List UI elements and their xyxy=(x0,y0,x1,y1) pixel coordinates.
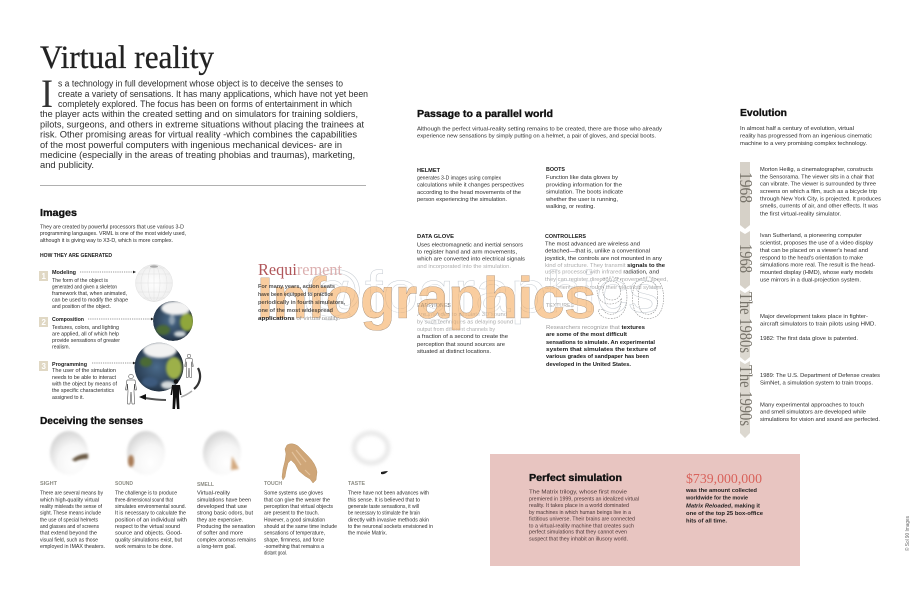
step 3: programming xyxy=(39,361,136,401)
step 1: modeling: 1 xyxy=(42,272,46,281)
taste: be necessary to stimulate the brain xyxy=(348,511,420,517)
smell: simulations have been xyxy=(197,497,251,503)
intro paragraph: create a variety of sensations. It has many applications, which have not yet been xyxy=(58,89,368,99)
step 2: composition: realism. xyxy=(52,344,70,350)
stat: box office amount xyxy=(685,472,763,524)
step 3: programming: with the object by means of xyxy=(51,382,117,388)
evolution intro: machine to a very promising complex technology. xyxy=(740,141,867,147)
panel: requirement xyxy=(258,260,345,322)
perfect simulation text xyxy=(529,490,639,542)
panel: evolution xyxy=(736,107,881,438)
heading: perfect simulation: Perfect simulation xyxy=(529,472,622,484)
stat: box office amount: $739,000,000 xyxy=(686,472,762,487)
sound xyxy=(114,481,187,550)
images description: although it is giving way to X3-D, which is more complex. xyxy=(40,238,173,244)
step 2: composition: provide sensations of greater xyxy=(52,338,120,344)
textures: Researchers recognize that textures xyxy=(546,325,645,331)
controllers: joystick, the controls are not mounted in any xyxy=(544,256,662,262)
watermark: infographics90: @fographics xyxy=(300,260,660,325)
entry: 1980s: 1989: The U.S. Department of Defense creates xyxy=(760,373,880,379)
timeline bar: The 1990s xyxy=(736,365,756,426)
sight: sight. These means include xyxy=(40,511,101,517)
helmet: HELMET xyxy=(417,168,441,174)
textures: various grades of sandpaper has been xyxy=(546,354,650,360)
sound: SOUND xyxy=(115,481,133,487)
sight: that extend beyond the xyxy=(40,531,97,537)
sound: work remains to be done. xyxy=(114,544,173,550)
step 3: programming: The user of the simulation xyxy=(52,368,116,374)
heading: images: Images xyxy=(40,207,77,219)
step 2: composition: are applied, all of which help xyxy=(52,332,119,338)
controllers: CONTROLLERS xyxy=(545,234,587,240)
entry: 1960s sensorama: smells, currents of air, and other effects. It was xyxy=(760,204,878,210)
perfect simulation text: premiered in 1999, presents an idealized virtual xyxy=(529,496,639,502)
requirement text: applications of virtual reality. xyxy=(258,316,340,322)
icon: textured globe xyxy=(153,301,194,341)
smell xyxy=(197,482,256,550)
step 1: modeling: can be used to modify the shape xyxy=(52,298,128,304)
timeline bar: 1968 xyxy=(736,172,756,203)
timeline bar: 1968 xyxy=(736,244,756,273)
sound: three-dimensional sound that xyxy=(115,497,173,503)
step 2: composition: Textures, colors, and lighting xyxy=(52,325,119,331)
subheading: how they are generated: HOW THEY ARE GENERATED xyxy=(40,253,112,259)
passage intro xyxy=(417,126,662,140)
entry: 1980s: SimNet, a simulation system to train troops. xyxy=(760,380,873,386)
data glove: which are converted into electrical signals xyxy=(416,256,525,262)
entry: 1980s: Major development takes place in fighter- xyxy=(760,314,868,320)
taste: directly with invasive methods akin xyxy=(348,517,429,523)
icon: face highlighting mouth xyxy=(354,433,388,474)
smell: of softer and more xyxy=(197,531,243,537)
credit: © Sol 90 Images xyxy=(904,516,911,551)
touch: Some systems use gloves xyxy=(264,491,323,497)
icon: hand xyxy=(282,444,317,483)
requirement text xyxy=(258,284,345,322)
icon: face highlighting nose xyxy=(203,431,241,475)
data glove: to register hand and arm movements, xyxy=(417,250,517,256)
step 3: programming: needs to be able to interact xyxy=(52,375,116,381)
sight: and glasses and of screens xyxy=(40,524,99,530)
sound: It is necessary to calculate the xyxy=(115,511,186,517)
touch: TOUCH xyxy=(264,481,282,487)
requirement text: one of the most widespread xyxy=(258,308,334,314)
watermark: infographics90: 90 xyxy=(594,266,666,331)
boots xyxy=(545,167,623,210)
entry: 1980s: aircraft simulators to train pilots using HMD. xyxy=(760,321,876,327)
step 3: programming: Programming xyxy=(52,362,88,368)
data glove: Uses electromagnetic and inertial sensors xyxy=(417,242,523,248)
intro paragraph: I xyxy=(41,71,53,116)
sight: which high-quality virtual xyxy=(39,497,99,503)
entry: 1960s sensorama: the first virtual-reality simulator. xyxy=(760,211,841,217)
earphones: a fraction of a second to create the xyxy=(417,334,508,340)
earphones: EARPHONES xyxy=(417,303,452,309)
touch: However, a good simulation xyxy=(264,517,325,523)
smell: strong basic odors, but xyxy=(197,511,253,517)
entry: 1990s: simulations for vision and sound are perfected. xyxy=(760,417,880,423)
images description xyxy=(40,224,186,244)
textures: are some of the most difficult xyxy=(546,332,627,338)
stat: box office amount: was the amount collected xyxy=(685,488,758,494)
entry: 1960s sensorama: screens on which a film, such as a bicycle trip xyxy=(760,189,877,195)
step 1: modeling xyxy=(39,270,136,310)
touch: shape, firmness, and force xyxy=(264,537,324,543)
taste: generate taste sensations, it will xyxy=(348,504,419,510)
entry: 1968 hmd: mounted display (HMD), whose early models xyxy=(760,270,873,276)
intro paragraph: medicine (especially in the areas of treating phobias and traumas), marketing, xyxy=(40,150,355,160)
intro paragraph: and publicity. xyxy=(40,160,94,170)
heading: deceiving the senses: Deceiving the senses xyxy=(40,415,143,427)
earphones: perception that sound sources are xyxy=(417,342,505,348)
step 1: modeling: framework that, when animated, xyxy=(52,291,127,297)
timeline bar: The 1980s xyxy=(736,292,756,353)
boots: walking, or resting. xyxy=(545,204,595,210)
smell: SMELL xyxy=(197,482,214,488)
watermark: infographics90: Infographics xyxy=(257,266,595,331)
smell: they are expensive. xyxy=(197,517,243,523)
evolution intro: In almost half a century of evolution, virtual xyxy=(740,126,854,132)
smell: developed that use xyxy=(197,504,247,510)
data glove: and incorporated into the simulation. xyxy=(417,264,511,270)
icon: wireframe sphere xyxy=(136,264,172,302)
evolution intro: reality has progressed from an ingenious cinematic xyxy=(740,134,872,140)
intro paragraph: pilots, surgeons, and others in extreme situations without placing the trainees at xyxy=(40,120,365,130)
step 2: composition: Composition xyxy=(52,317,85,323)
requirement text: have been equipped to practice xyxy=(258,292,333,298)
perfect simulation text: reality. It takes place in a world dominated xyxy=(529,503,629,509)
controllers xyxy=(544,234,668,291)
requirement text: For many years, action seats xyxy=(258,284,335,290)
sound: source and objects. Good- xyxy=(115,531,182,537)
earphones xyxy=(417,303,513,355)
images description: They are created by powerful processors that use various 3-D xyxy=(40,224,184,230)
step 1: modeling: Modeling xyxy=(52,270,77,276)
step 3: programming: 3 xyxy=(42,362,46,371)
entry: 1990s: and smell simulators are developed while xyxy=(760,410,866,416)
sound: position of an individual with xyxy=(115,517,187,523)
intro paragraph: the player acts within the created setting and on simulators for training soldiers, xyxy=(40,109,358,119)
entry: 1960s sensorama xyxy=(760,167,881,217)
boots: simulation. The boots indicate xyxy=(546,190,623,196)
stat: box office amount: worldwide for the movie xyxy=(685,496,748,502)
helmet: person experiencing the simulation. xyxy=(417,197,507,203)
icon: face highlighting ear xyxy=(127,431,165,475)
boots: whether the user is running, xyxy=(545,197,618,203)
smell: Virtual-reality xyxy=(197,491,230,497)
images description: programming languages. VRML is one of the most widely used, xyxy=(40,231,186,237)
sight xyxy=(39,481,105,550)
boots: Function like data gloves by xyxy=(546,175,618,181)
textures: TEXTURES xyxy=(546,303,575,309)
touch: are present to the touch. xyxy=(264,511,319,517)
stat: box office amount: hits of all time. xyxy=(686,518,727,524)
intro paragraph xyxy=(40,71,368,170)
textures xyxy=(546,303,656,368)
data glove: DATA GLOVE xyxy=(417,234,455,240)
taste: There have not been advances with xyxy=(348,491,429,497)
perfect simulation text: perfect simulations that they cannot even xyxy=(529,530,627,536)
step 3: programming: assigned to it. xyxy=(52,395,84,401)
intro paragraph: s a technology in full development whose object is to deceive the senses to xyxy=(58,78,343,88)
touch: perception that virtual objects xyxy=(264,504,333,510)
intro paragraph: of the most powerful computers with ingenious mechanical devices- are in xyxy=(40,140,342,150)
stat: box office amount: Matrix Reloaded , making it xyxy=(686,503,760,509)
taste: this sense. It is believed that to xyxy=(348,497,420,503)
entry: 1968 hmd: scientist, proposes the use of a video display xyxy=(760,240,873,246)
panel: passage to a parallel world xyxy=(416,108,668,368)
sight: SIGHT xyxy=(40,481,57,487)
sight: reality misleads the sense of xyxy=(40,504,102,510)
perfect simulation text: by machines in which human beings live in a xyxy=(529,510,632,516)
step 3: programming: the specific characteristics xyxy=(52,388,114,394)
step 1: modeling: The form of the object is xyxy=(52,278,108,284)
controllers: kind of structure. They transmit signals to the xyxy=(545,263,665,269)
entry: 1990s: Many experimental approaches to touch xyxy=(760,402,864,408)
perfect simulation text: fictitious universe. Their brains are connected xyxy=(529,517,635,523)
taste xyxy=(348,481,433,537)
textures: sensations to simulate. An experimental xyxy=(546,340,655,346)
taste: to the neuronal sockets envisioned in xyxy=(348,524,433,530)
perfect simulation text: to a virtual-reality machine that creates such xyxy=(529,523,634,529)
step 2: composition xyxy=(39,317,154,350)
controllers: and orientation through their electrical system. xyxy=(545,285,663,291)
icon: interactive globe with users xyxy=(126,342,200,409)
entry: 1968 hmd xyxy=(760,233,875,283)
sound: The challenge is to produce xyxy=(115,491,177,497)
watermark: infographics90: Infographics xyxy=(257,266,595,331)
passage intro: Although the perfect virtual-reality setting remains to be created, there are those who already xyxy=(417,126,662,132)
touch: -something that remains a xyxy=(264,544,325,550)
entry: 1968 hmd: respond to the head's orientation to make xyxy=(760,255,863,261)
passage intro: experience new sensations by simply putting on a helmet, a pair of gloves, and special boots. xyxy=(417,134,656,140)
sight: the use of special helmets xyxy=(40,517,98,523)
perfect simulation text: suspect that they inhabit an illusory world. xyxy=(529,536,628,542)
heading: requirement: Requirement xyxy=(258,260,342,279)
smell: complex aromas remains xyxy=(197,537,256,543)
entry: 1990s xyxy=(760,402,880,423)
sight: visual field, such as those xyxy=(40,537,98,543)
touch xyxy=(264,481,337,557)
controllers: detached—that is, unlike a conventional xyxy=(545,248,650,254)
entry: 1960s sensorama: can vibrate. The viewer is surrounded by three xyxy=(760,182,876,188)
earphones: Are intended to simulate 3D sound xyxy=(417,312,507,318)
panel: deceiving the senses xyxy=(39,415,433,557)
step 1: modeling: generated and given a skeleton xyxy=(52,284,117,290)
textures: developed in the United States. xyxy=(546,362,631,368)
data glove xyxy=(416,234,525,270)
smell: Producing the sensation xyxy=(197,524,255,530)
heading: passage to a parallel world: Passage to a parallel world xyxy=(417,108,553,120)
entry: 1968 hmd: Ivan Sutherland, a pioneering computer xyxy=(760,233,862,239)
entry: 1968 hmd: that can be placed on a viewer's head and xyxy=(760,248,868,254)
controllers: user's processor with infrared radiation, and xyxy=(545,270,659,276)
taste: TASTE xyxy=(348,481,366,487)
heading: evolution: Evolution xyxy=(740,107,787,119)
earphones: by such techniques as delaying sound xyxy=(417,320,513,326)
touch: should at the same time include xyxy=(264,524,337,530)
sound: simulates environmental sound. xyxy=(115,504,186,510)
helmet xyxy=(417,168,524,203)
taste: the movie Matrix. xyxy=(348,531,387,537)
entry: 1968 hmd: simulations more real. The result is the head- xyxy=(760,263,875,269)
earphones: situated at distinct locations. xyxy=(417,349,491,355)
touch: that can give the wearer the xyxy=(264,497,330,503)
entry: 1960s sensorama: the Sensorama. The viewer sits in a chair that xyxy=(760,174,874,180)
icon: face highlighting eyes xyxy=(50,431,88,475)
boots: providing information for the xyxy=(546,182,622,188)
entry: 1960s sensorama: Morton Heilig, a cinematographer, constructs xyxy=(760,167,873,173)
helmet: generates 3-D images using complex xyxy=(417,176,501,182)
controllers: they can register direction of movement, speed, xyxy=(545,277,668,283)
helmet: according to the head movements of the xyxy=(417,190,521,196)
controllers: The most advanced are wireless and xyxy=(545,242,640,248)
perfect simulation text: The Matrix trilogy, whose first movie xyxy=(529,490,627,496)
sight: There are several means by xyxy=(40,491,103,497)
sound: respect to the virtual sound xyxy=(115,524,180,530)
panel: perfect simulation xyxy=(490,454,800,566)
boots: BOOTS xyxy=(546,167,566,173)
earphones: output from different channels by xyxy=(417,327,495,333)
step 1: modeling: and position of the object. xyxy=(52,304,111,310)
touch: distant goal. xyxy=(264,551,287,557)
evolution intro xyxy=(740,126,872,147)
stat: box office amount: one of the top 25 box-office xyxy=(686,511,763,517)
entry: 1980s xyxy=(760,314,880,386)
timeline bar xyxy=(736,162,756,438)
requirement text: periodically in fourth simulators, xyxy=(258,300,345,306)
panel: images xyxy=(39,207,200,409)
step 2: composition: 2 xyxy=(42,318,46,327)
sound: quality simulations exist, but xyxy=(115,537,182,543)
entry: 1960s sensorama: through New York City, is projected. It produces xyxy=(760,196,881,202)
entry: 1968 hmd: use mirrors in a dual-projection system. xyxy=(760,277,861,283)
intro paragraph: risk. Other promising areas for virtual reality -which combines the capabilities xyxy=(40,130,358,140)
entry: 1980s: 1982: The first data glove is patented. xyxy=(760,336,858,342)
sight: employed in IMAX theaters. xyxy=(40,544,105,550)
smell: a long-term goal. xyxy=(197,544,236,550)
textures: system that simulates the texture of xyxy=(546,347,656,353)
helmet: calculations while it changes perspectives xyxy=(417,182,524,188)
touch: sensations of temperature, xyxy=(264,531,325,537)
title: Virtual reality xyxy=(40,40,215,76)
intro paragraph: completely explored. The focus has been on forms of entertainment in which xyxy=(58,99,352,109)
